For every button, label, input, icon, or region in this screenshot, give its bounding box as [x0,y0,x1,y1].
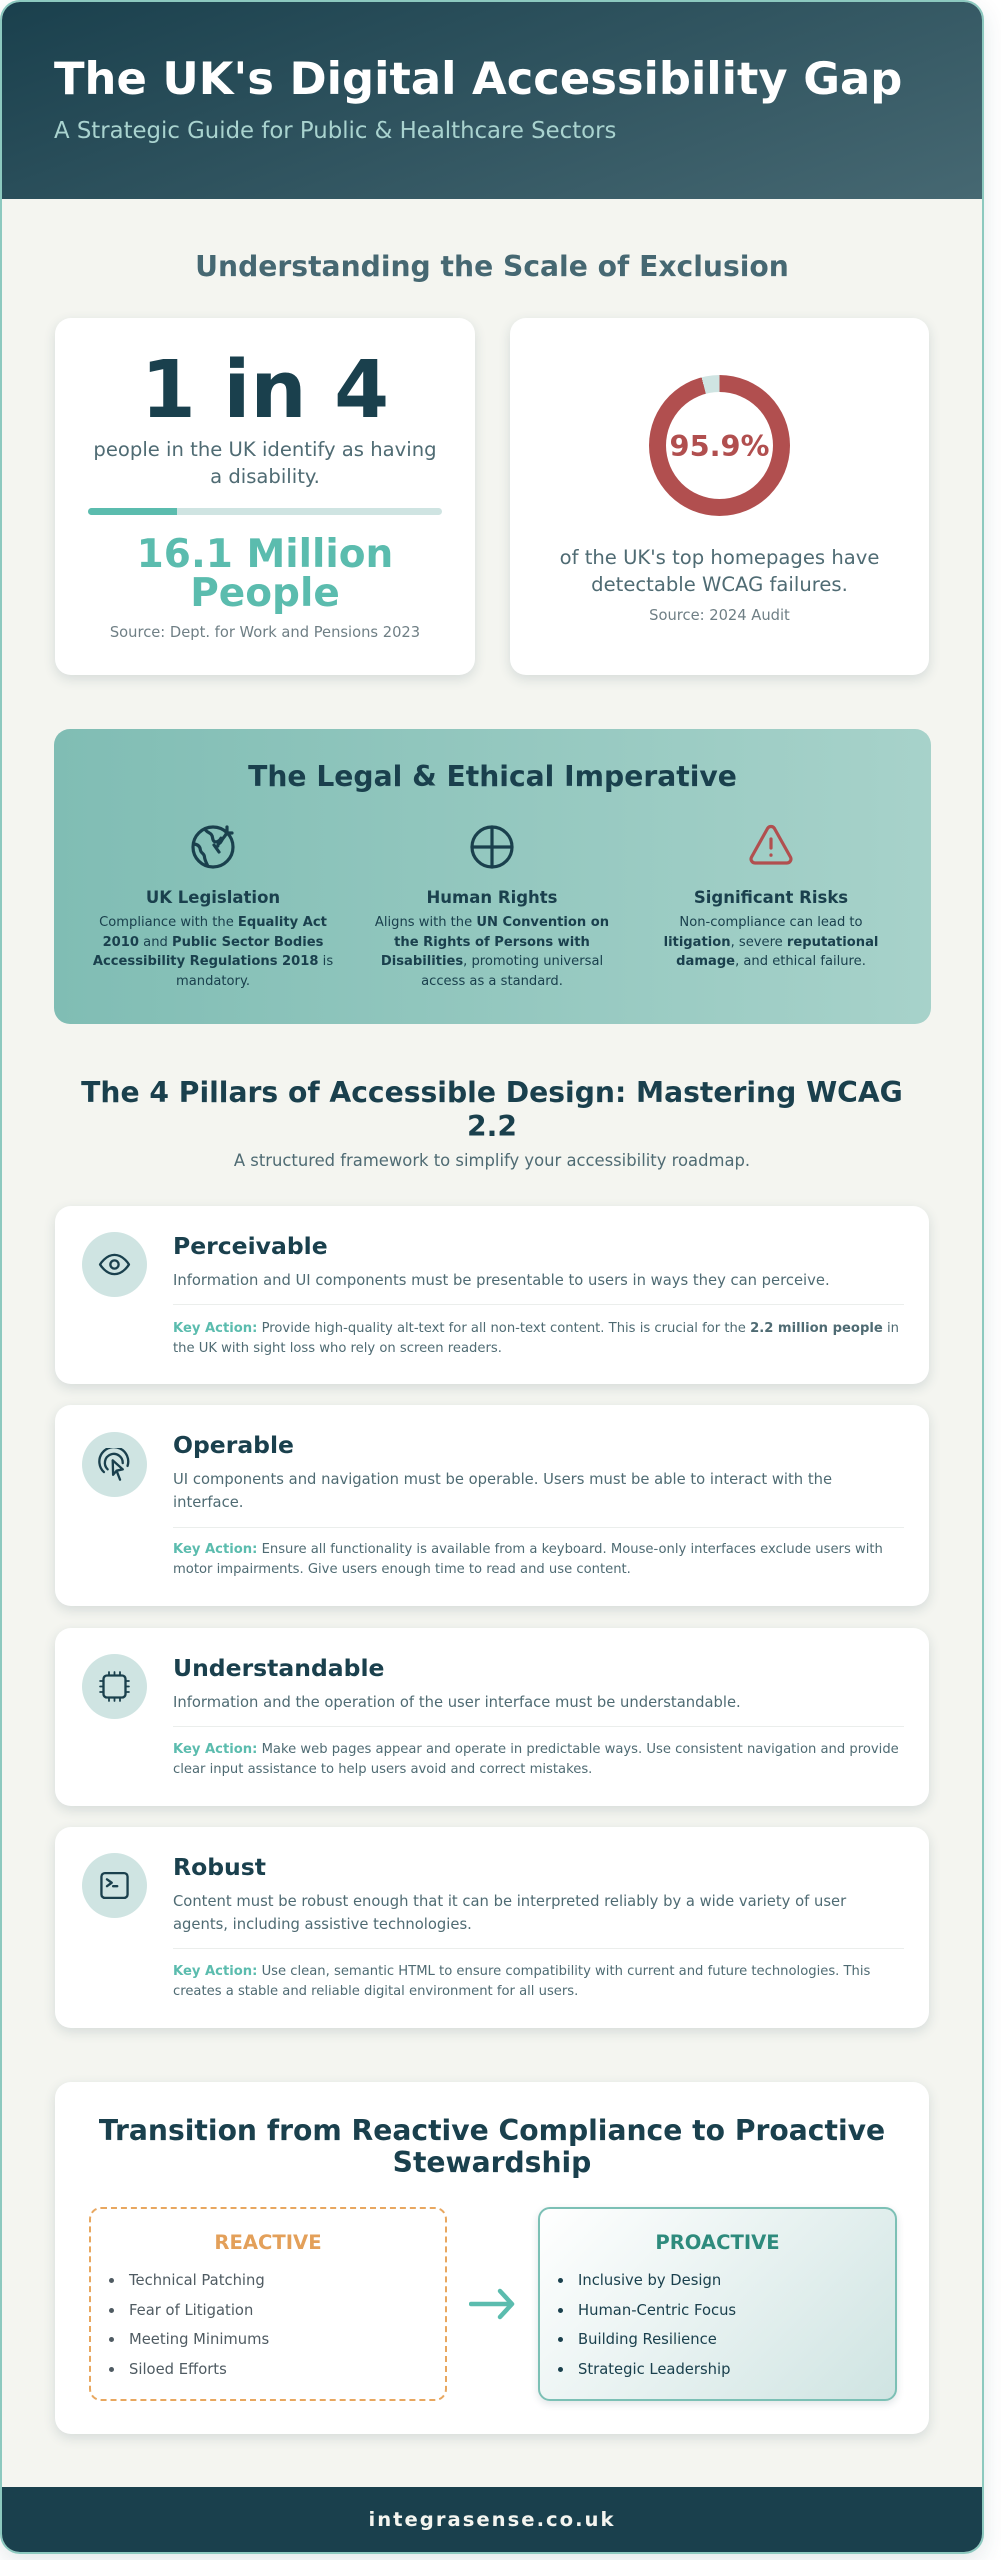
column: UK legislation [93,825,333,989]
key action: Key Action: Make web pages appear and operate in predictable ways. Use consistent navigation and provide [173,1742,899,1757]
key action [173,1964,870,1999]
list: Fear of Litigation [129,2302,253,2318]
pillar description: Information and the operation of the user interface must be understandable. [173,1694,741,1711]
statistic description: detectable WCAG failures. [591,572,848,596]
list: Human-Centric Focus [578,2302,736,2318]
pillar description [173,1893,846,1933]
heading: scale of exclusion: Understanding the Scale of Exclusion [195,250,789,283]
key action: motor impairments. Give users enough time to read and use content. [173,1562,631,1577]
panel: understandable [52,1628,932,1814]
column: human rights [375,825,609,989]
pillar description: Information and UI components must be presentable to users in ways they can perceive. [173,1272,830,1289]
pillar title: Understandable [173,1654,384,1682]
list [558,2272,736,2378]
icon: terminal [82,1853,147,1918]
panel heading: Stewardship [393,2146,591,2179]
16.1 million figure: People [190,571,340,616]
key action: Key Action: Provide high-quality alt-text for all non-text content. This is crucial for the 2.2 million people in [173,1321,899,1336]
column text: Aligns with the UN Convention on [375,915,609,930]
column: significant risks [664,824,878,969]
key action [173,1321,899,1356]
key action [173,1542,883,1577]
footer link text: integrasense.co.uk [368,2508,616,2531]
key action: Key Action: Use clean, semantic HTML to ensure compatibility with current and future technologies. This [173,1964,870,1979]
list: Strategic Leadership [578,2360,730,2378]
statistic description: people in the UK identify as having [93,438,437,461]
key action [173,1742,899,1777]
icon: circle with cross [470,825,514,869]
donut chart [649,375,790,516]
column text [664,915,878,969]
pillar description: interface. [173,1494,243,1511]
header banner [2,2,982,199]
column text: Compliance with the Equality Act [99,915,327,930]
pillars subheading: A structured framework to simplify your accessibility roadmap. [234,1151,750,1170]
column text: Accessibility Regulations 2018 is [93,954,333,969]
pillar description [173,1471,832,1511]
statistic description [93,438,437,488]
arrow [469,2288,514,2320]
source: Source: 2024 Audit [649,607,790,624]
panel: transition [55,2082,929,2434]
list: Siloed Efforts [129,2360,227,2378]
icon: eye [82,1232,147,1297]
box: reactive [89,2207,447,2401]
icon: globe [191,825,235,869]
panel heading: Transition from Reactive Compliance to Proactive [99,2114,885,2147]
list: Meeting Minimums [129,2331,269,2348]
key action: Key Action: Ensure all functionality is available from a keyboard. Mouse-only interfaces exclude users with [173,1542,883,1557]
title: The UK's Digital Accessibility Gap [54,52,902,105]
pillar title: Robust [173,1853,266,1881]
panel: robust [52,1827,932,2036]
heading: four pillars [81,1076,903,1143]
panel heading: The Legal & Ethical Imperative [248,760,737,793]
source: Source: Dept. for Work and Pensions 2023 [110,624,420,641]
big statistic: 1 in 4 [141,344,389,436]
list: Technical Patching [129,2272,265,2289]
statistic description: a disability. [210,464,320,488]
panel: operable [52,1405,932,1614]
column text [93,915,333,989]
progress bar [88,508,442,515]
pillar description: Content must be robust enough that it can be interpreted reliably by a wide variety of user [173,1893,846,1910]
heading: four pillars: The 4 Pillars of Accessible Design: Mastering WCAG [81,1076,903,1109]
column text [375,915,609,989]
pillar title: Perceivable [173,1232,328,1260]
key action: clear input assistance to help users avoid and correct mistakes. [173,1762,592,1777]
16.1 million figure [137,532,393,616]
panel: perceivable [52,1206,932,1392]
icon: warning triangle [749,824,793,865]
panel: legal and ethical imperative [54,729,931,1024]
heading: four pillars: 2.2 [467,1110,517,1143]
panel: 95.9% statistic [510,318,929,675]
box: proactive [538,2207,897,2401]
column heading: Human Rights [426,888,558,907]
column text: access as a standard. [421,974,563,989]
column text: damage, and ethical failure. [676,954,866,969]
key action: creates a stable and reliable digital environment for all users. [173,1984,578,1999]
statistic description: of the UK's top homepages have [560,546,879,569]
list: Building Resilience [578,2331,717,2348]
16.1 million figure: 16.1 Million [137,532,393,577]
column text: Disabilities, promoting universal [381,954,603,969]
column text: 2010 and Public Sector Bodies [103,935,323,950]
column text: mandatory. [176,974,250,989]
footer [2,2487,982,2552]
key action: the UK with sight loss who rely on screen readers. [173,1341,502,1356]
donut value: 95.9% [670,429,769,463]
column text: the Rights of Persons with [394,935,590,950]
column heading: Significant Risks [694,888,848,907]
pillar title: Operable [173,1431,294,1459]
column text: Non-compliance can lead to [679,915,863,930]
subtitle: A Strategic Guide for Public & Healthcare Sectors [54,118,616,144]
statistic description [560,546,879,596]
box heading: PROACTIVE [655,2231,780,2254]
list: Inclusive by Design [578,2272,721,2289]
icon: pointer with signal arcs [82,1432,147,1497]
box heading: REACTIVE [214,2231,322,2254]
column text: litigation, severe reputational [664,935,878,950]
pillar description: UI components and navigation must be operable. Users must be able to interact with the [173,1471,832,1488]
panel heading [99,2114,885,2179]
column heading: UK Legislation [146,888,280,907]
icon: chip [82,1654,147,1719]
pillar description: agents, including assistive technologies. [173,1916,472,1933]
list [109,2272,269,2378]
panel: 1 in 4 statistic [55,318,475,675]
